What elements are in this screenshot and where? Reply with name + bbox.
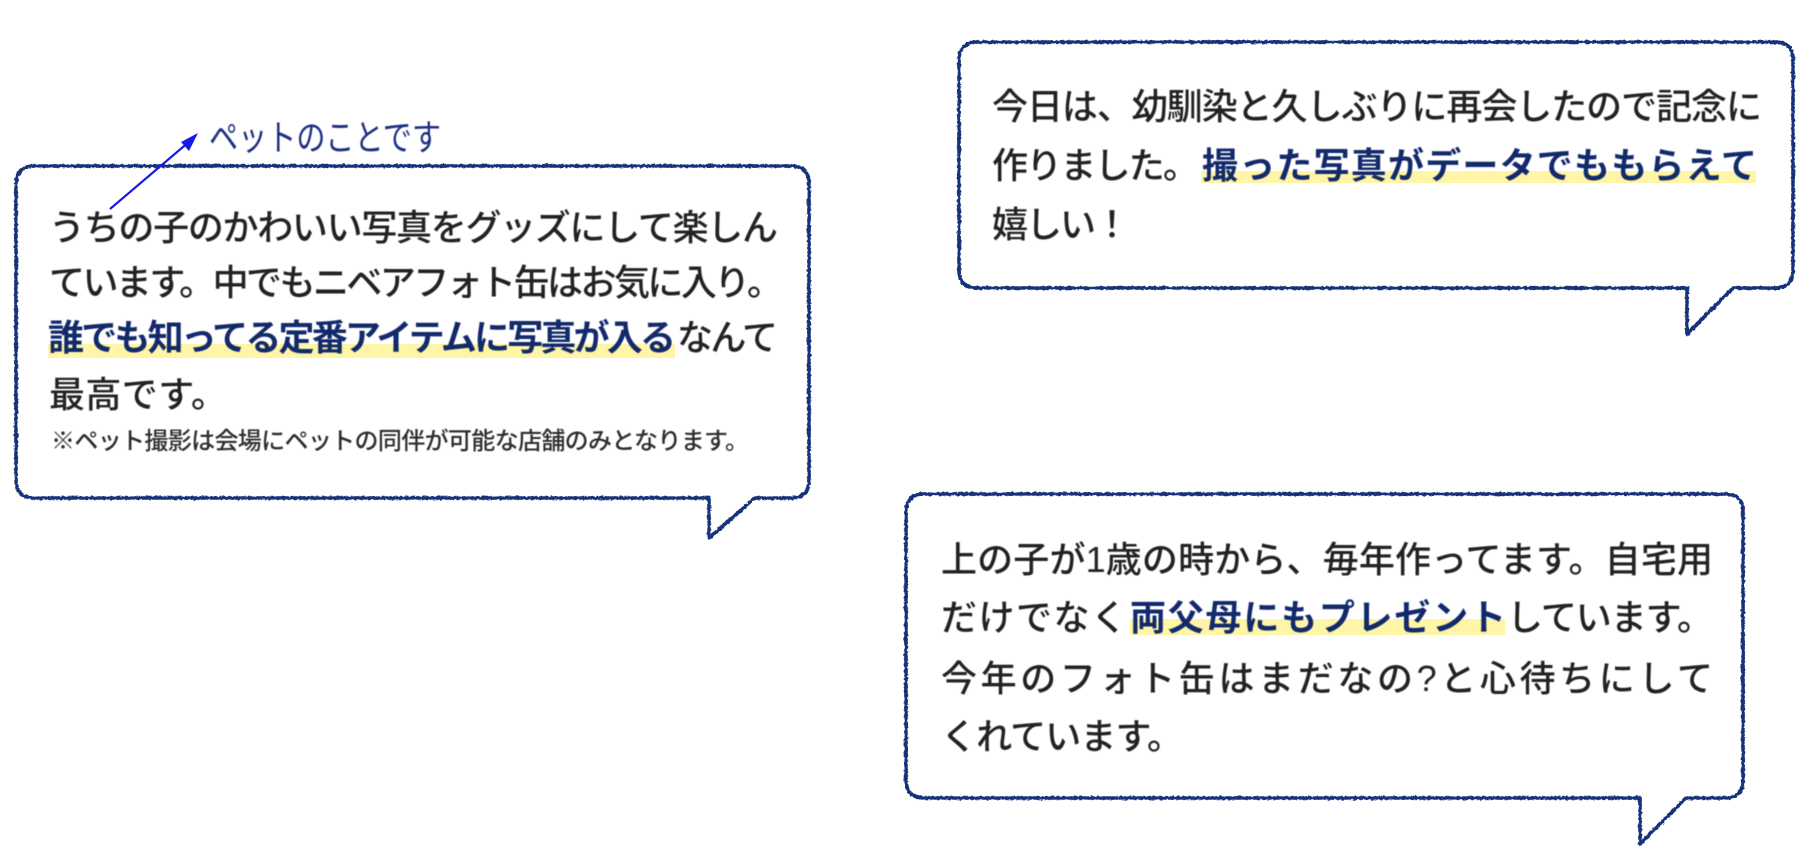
speech bubble: annual family gift	[906, 494, 1743, 844]
annotation label: ペットのことです	[209, 117, 441, 158]
annotation arrow	[110, 133, 198, 209]
body text line 2 start: 作りました。	[992, 145, 1199, 186]
highlighted text: 撮った写真がデータでももらえて	[1202, 145, 1757, 186]
body text line 1: うちの子のかわいい写真をグッズにして楽しん	[49, 207, 778, 248]
bubble outline	[959, 42, 1793, 334]
body text line 4: 最高です。	[49, 374, 227, 415]
body text line 1: 今日は、幼馴染と久しぶりに再会したので記念に	[992, 86, 1762, 127]
highlight marker	[48, 344, 675, 358]
bubble outline	[16, 166, 809, 538]
body text line 3: 今年のフォト缶はまだなの?と心待ちにして	[941, 658, 1713, 699]
body text line 2 end: しています。	[1507, 597, 1713, 638]
body text line 3 end: なんて	[677, 317, 778, 358]
body text line 2 start: だけでなく	[941, 597, 1127, 638]
body text line 3: 嬉しい！	[992, 204, 1130, 245]
bubble outline	[906, 494, 1743, 844]
highlight marker	[1130, 619, 1505, 635]
highlighted text: 誰でも知ってる定番アイテムに写真が入る	[48, 317, 676, 358]
speech bubble: childhood friend reunion	[959, 42, 1793, 334]
body text line 4: くれています。	[941, 716, 1183, 757]
speech bubble: pet photo goods	[16, 166, 809, 538]
footnote: ※ペット撮影は会場にペットの同伴が可能な店舗のみとなります。	[51, 428, 749, 455]
body text line 1: 上の子が1歳の時から、毎年作ってます。自宅用	[941, 539, 1713, 580]
body text line 2: ています。中でもニベアフォト缶はお気に入り。	[49, 262, 783, 303]
highlight marker	[1201, 171, 1756, 183]
highlighted text: 両父母にもプレゼント	[1130, 597, 1506, 638]
